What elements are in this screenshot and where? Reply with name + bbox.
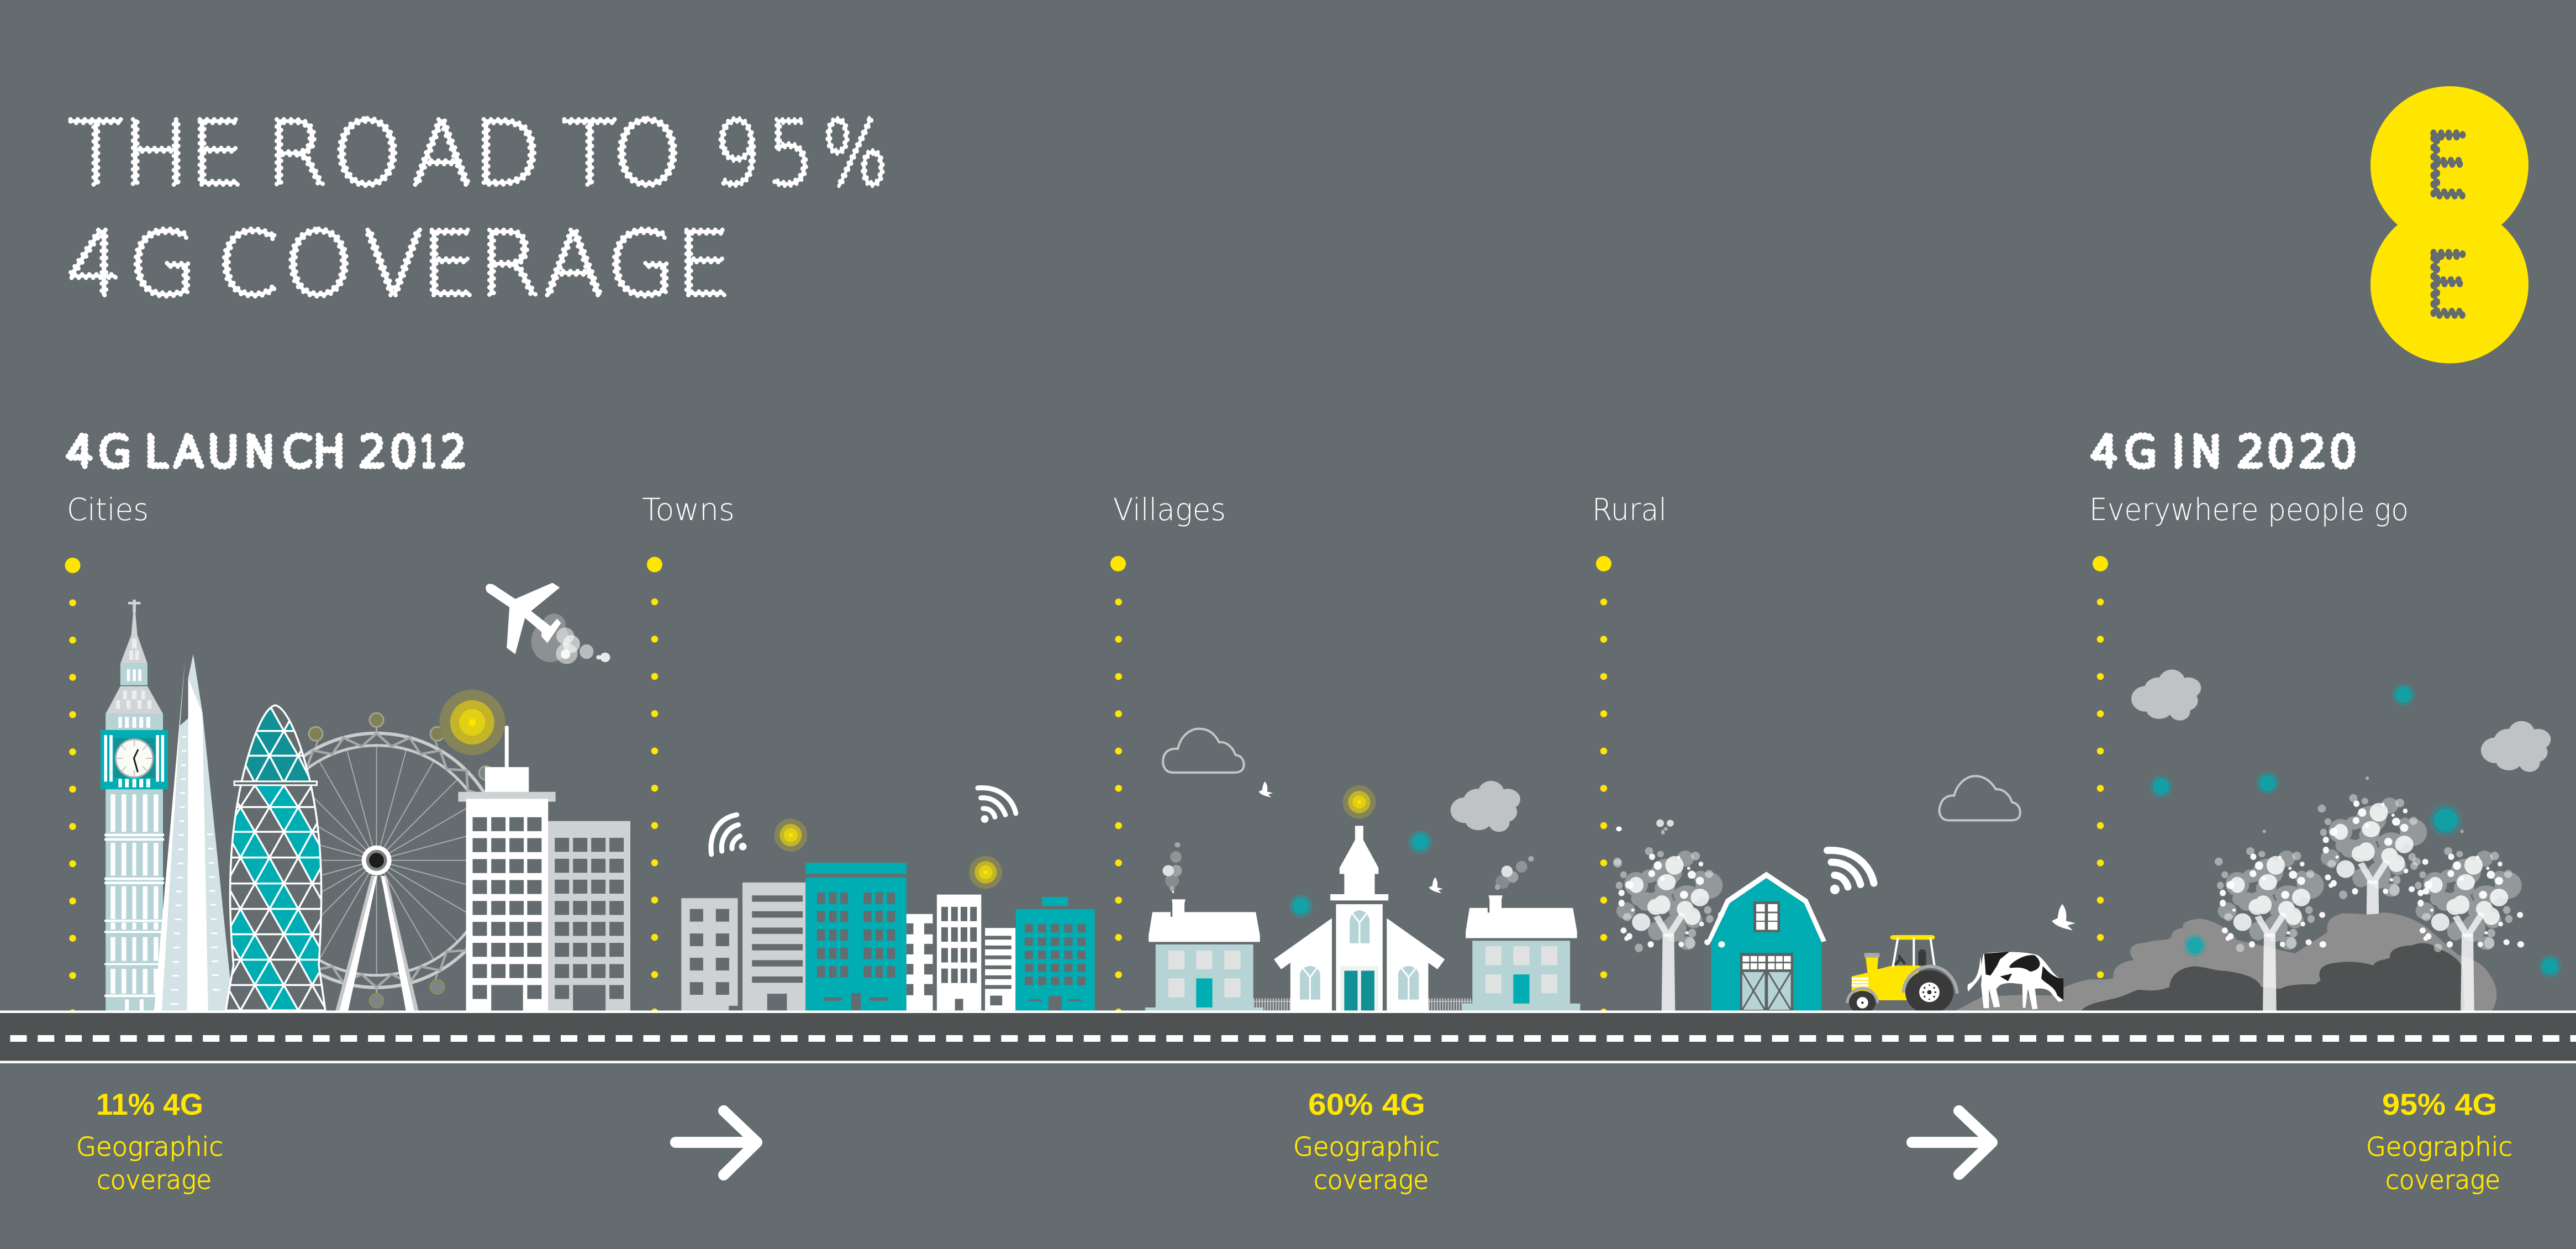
icon: grey cloud village: [1451, 781, 1520, 832]
stat: 11%: 11% 4G: [96, 1087, 203, 1121]
building: teal block G: [1016, 897, 1095, 1010]
scene: cities - white tower: [459, 726, 556, 1011]
scene: towns: [681, 788, 1095, 1010]
scene: rural: [1613, 776, 2020, 1014]
building: teal block C: [805, 863, 907, 1010]
heading: 4G launch 2012: 4G LAUNCH 20: [66, 428, 417, 477]
icon: EE logo: E: [2425, 236, 2469, 335]
scene: villages: [1145, 729, 1580, 1011]
stat: 60%: Geographic: [1293, 1132, 1440, 1162]
icon: EE logo: [2370, 86, 2528, 364]
arrow 1: [676, 1111, 757, 1175]
building: white notched block D: [907, 914, 933, 1010]
icon: outline cloud: [1163, 729, 1244, 773]
heading: 4G launch 2012: 2: [441, 427, 467, 476]
stat: 11%: Geographic: [76, 1132, 223, 1162]
building: grey block A: [681, 898, 737, 1010]
signal left: [774, 818, 807, 852]
stat: 11%: [76, 1087, 223, 1195]
scene: cities - The Gherkin: [222, 705, 330, 1010]
icon: cloud everywhere left: [2131, 670, 2201, 721]
icon: wifi rural: [1827, 851, 1874, 894]
label: Cities: Cities: [67, 492, 149, 527]
stat: 60%: coverage: [1314, 1165, 1429, 1195]
icon: wifi left: [711, 815, 746, 854]
title: THE ROAD TO: [69, 102, 683, 206]
tractor: [1847, 935, 1957, 1014]
house left: [1145, 842, 1263, 1011]
stat: 11%: coverage: [97, 1165, 212, 1195]
stat: 60%: 60% 4G: [1308, 1087, 1425, 1121]
title: 4G COVERAGE: [66, 213, 732, 317]
fence: [1253, 1001, 1473, 1005]
icon: wifi right: [978, 788, 1016, 823]
road: [0, 1010, 2576, 1063]
label: Rural: Rural: [1592, 492, 1667, 527]
cow: [1967, 952, 2063, 1009]
scene: everywhere - trees, bushes and signals: [1956, 776, 2496, 1011]
icon: cloud everywhere right: [2481, 721, 2551, 772]
barn: [1707, 872, 1826, 1011]
signal: teal left: [1289, 894, 1313, 917]
tree: right: [2412, 830, 2524, 1011]
stat: 95%: [2366, 1087, 2512, 1195]
signal: teal upper: [1409, 831, 1432, 854]
signal: teal group: [2150, 683, 2562, 978]
icon: outline cloud rural: [1939, 776, 2020, 820]
scene: cities - The Shard: [154, 654, 234, 1011]
bush: light: [1956, 912, 2496, 1011]
stat: 95%: coverage: [2385, 1165, 2500, 1195]
title: %: [822, 102, 888, 206]
scene: cities - Big Ben: [101, 600, 168, 1011]
tree: rural: [1613, 830, 1725, 1011]
building: grey block B: [742, 883, 805, 1010]
title: [66, 102, 888, 317]
stat: 60%: [1293, 1087, 1440, 1195]
heading: 4G launch 2012: 1: [420, 427, 436, 476]
icon: bird rural: [2052, 904, 2075, 931]
scene: cities - grey office block: [548, 821, 630, 1011]
scene: cities - London Eye: [250, 713, 504, 1011]
icon: EE logo: E: [2425, 117, 2469, 216]
icon: bird 2: [1429, 877, 1443, 893]
tree: left: [2215, 830, 2326, 1011]
tree: middle: [2317, 776, 2430, 958]
building: white block E: [937, 895, 981, 1010]
signal right: [969, 856, 1002, 889]
title: 95: [713, 102, 815, 206]
icon: bird 1: [1258, 781, 1273, 797]
heading: 4G in 2020: 4G IN 2020: [2091, 428, 2357, 477]
bush: dark: [2082, 943, 2465, 1011]
building: white striped block F: [985, 928, 1015, 1010]
scene: cities - signal: [439, 690, 505, 755]
icon: airplane with smoke: [486, 583, 610, 664]
label: Everywhere people go: Everywhere people go: [2089, 492, 2409, 527]
stat: 95%: Geographic: [2366, 1132, 2512, 1162]
house right: [1462, 856, 1580, 1011]
stat: 95%: 95% 4G: [2382, 1087, 2497, 1121]
floating dots: [1613, 820, 1674, 868]
dotted stage markers: [65, 556, 2108, 1017]
signal: church yellow: [1342, 785, 1376, 819]
label: Villages: Villages: [1113, 492, 1226, 527]
church: [1274, 826, 1445, 1011]
label: Towns: Towns: [642, 492, 735, 527]
arrow 2: [1912, 1111, 1992, 1174]
